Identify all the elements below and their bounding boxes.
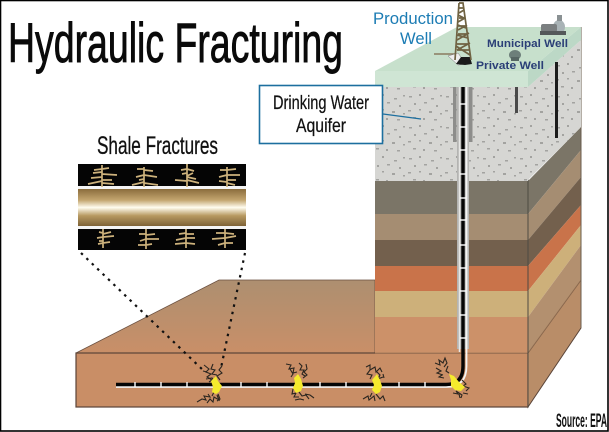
surface slab	[375, 27, 581, 87]
label: production well: Well	[400, 30, 432, 48]
drinking water aquifer layer	[375, 40, 581, 181]
outer casing	[453, 87, 472, 142]
white pipe sheath	[116, 87, 466, 387]
fracture branches	[88, 164, 240, 249]
production wellbore	[116, 87, 472, 387]
gray pipe casing	[457, 87, 469, 349]
pipe cross-section	[78, 186, 246, 229]
black pipe core	[116, 87, 463, 384]
fracture zone 4	[435, 358, 469, 398]
heading: shale fractures: Shale Fractures	[97, 132, 218, 160]
icon: private well	[509, 50, 521, 61]
icon: drilling derrick	[434, 3, 472, 65]
municipal well shaft	[555, 62, 558, 138]
callout: drinking water aquifer: Aquifer	[296, 116, 347, 137]
callout: drinking water aquifer	[260, 86, 382, 144]
aquifer leader line	[383, 114, 421, 119]
callout: drinking water aquifer: Drinking Water	[273, 93, 370, 114]
label: municipal well: Municipal Well	[487, 38, 568, 50]
side strata layers	[528, 127, 581, 353]
front strata layers	[375, 181, 528, 353]
ground block: shale formation	[76, 280, 581, 407]
geological column: rock strata	[375, 27, 581, 407]
title: Hydraulic Fracturing	[8, 11, 343, 74]
fracture zone 2	[286, 363, 314, 400]
private well shaft	[515, 87, 518, 113]
label: private well: Private Well	[476, 60, 544, 72]
label: production well	[373, 10, 453, 48]
fracture zone 3	[363, 365, 385, 401]
panel: shale fractures inset	[78, 164, 246, 250]
label: production well: Production	[373, 10, 453, 28]
dotted zoom lines	[81, 253, 245, 372]
icon: municipal well	[540, 15, 566, 35]
fracture zone 1	[197, 364, 222, 403]
white pipe joints	[135, 104, 466, 387]
